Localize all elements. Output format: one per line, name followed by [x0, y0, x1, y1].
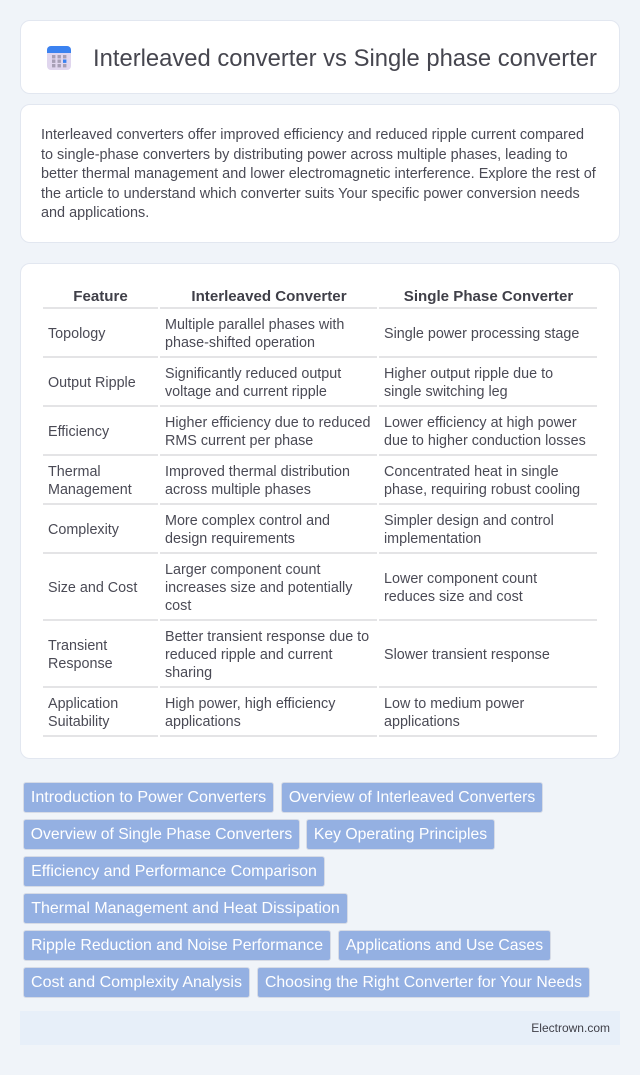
thermal single phase: Concentrated heat in single: [384, 464, 559, 480]
intro text: [41, 127, 596, 221]
tag: [306, 819, 495, 850]
application single phase: applications: [384, 714, 460, 730]
panel: comparison table: [20, 263, 620, 759]
table header: single phase converter: Single Phase Converter: [404, 288, 573, 305]
tag: Overview of Interleaved Converters: [289, 789, 535, 806]
efficiency single phase: [384, 415, 586, 449]
complexity single phase: [384, 513, 554, 547]
tag: Introduction to Power Converters: [31, 788, 266, 806]
icon: calendar: [47, 46, 71, 70]
output ripple interleaved: [165, 366, 342, 400]
output ripple single phase: [384, 366, 553, 400]
thermal interleaved: across multiple phases: [165, 482, 311, 498]
transient interleaved: Better transient response due to: [165, 629, 369, 645]
row: application suitability: Application: [48, 696, 118, 712]
efficiency single phase: Lower efficiency at high power: [384, 415, 577, 431]
thermal interleaved: [165, 464, 350, 498]
panel: header: [20, 20, 620, 94]
footer credit: Electrown.com: [531, 1021, 610, 1035]
thermal single phase: phase, requiring robust cooling: [384, 482, 580, 498]
tag: Ripple Reduction and Noise Performance: [31, 937, 323, 954]
tag: [23, 893, 348, 924]
row: complexity: Complexity: [48, 522, 119, 538]
table header: interleaved converter: Interleaved Converter: [191, 288, 347, 305]
row: size and cost: Size and Cost: [48, 580, 137, 596]
intro text: and applications.: [41, 205, 149, 221]
intro text: the article to understand which converter suits Your specific power conversion needs: [41, 186, 580, 202]
complexity interleaved: design requirements: [165, 531, 295, 547]
tag: Overview of Single Phase Converters: [31, 826, 292, 843]
transient interleaved: reduced ripple and current: [165, 647, 332, 663]
title: Interleaved converter vs Single phase converter: [93, 45, 597, 72]
row: topology: Topology: [48, 326, 105, 342]
row: output ripple: Output Ripple: [48, 375, 136, 391]
complexity interleaved: [165, 513, 330, 547]
application interleaved: applications: [165, 714, 241, 730]
row: application suitability: Suitability: [48, 714, 109, 730]
panel: introduction: [20, 104, 620, 243]
size single phase: reduces size and cost: [384, 589, 523, 605]
application single phase: Low to medium power: [384, 696, 524, 712]
tag: [281, 782, 543, 813]
size single phase: Lower component count: [384, 571, 537, 587]
footer: [20, 1011, 620, 1045]
output ripple single phase: Higher output ripple due to: [384, 366, 553, 382]
efficiency interleaved: RMS current per phase: [165, 433, 313, 449]
tag: Thermal Management and Heat Dissipation: [31, 900, 340, 917]
output ripple single phase: single switching leg: [384, 384, 508, 400]
tag: [257, 967, 590, 998]
row: transient response: [48, 638, 113, 672]
tag: [23, 856, 325, 887]
intro text: to single-phase converters by distributing power across multiple phases, leading to: [41, 146, 568, 162]
transient single phase: Slower transient response: [384, 647, 550, 663]
efficiency single phase: due to higher conduction losses: [384, 433, 586, 449]
tag: Key Operating Principles: [314, 826, 487, 843]
tag: Efficiency and Performance Comparison: [31, 863, 317, 880]
row: application suitability: [48, 696, 118, 730]
tag: [338, 930, 551, 961]
row: thermal management: Management: [48, 482, 132, 498]
topology single phase: Single power processing stage: [384, 326, 579, 342]
complexity single phase: implementation: [384, 531, 481, 547]
table header: feature: Feature: [73, 288, 128, 305]
row: thermal management: Thermal: [48, 464, 101, 480]
complexity interleaved: More complex control and: [165, 513, 330, 529]
transient interleaved: sharing: [165, 665, 212, 681]
tag: Choosing the Right Converter for Your Needs: [265, 974, 582, 991]
transient interleaved: [165, 629, 369, 681]
tag: [23, 930, 331, 961]
thermal single phase: [384, 464, 580, 498]
size interleaved: [165, 562, 352, 614]
topology interleaved: [165, 317, 344, 351]
tag: [23, 782, 274, 813]
row: thermal management: [48, 464, 132, 498]
row: transient response: Transient: [48, 638, 107, 654]
output ripple interleaved: Significantly reduced output: [165, 366, 341, 382]
topology interleaved: Multiple parallel phases with: [165, 317, 344, 333]
size interleaved: increases size and potentially: [165, 580, 352, 596]
size interleaved: Larger component count: [165, 562, 320, 578]
efficiency interleaved: Higher efficiency due to reduced: [165, 415, 370, 431]
output ripple interleaved: voltage and current ripple: [165, 384, 327, 400]
tag: Applications and Use Cases: [346, 937, 543, 954]
tag: [23, 819, 300, 850]
complexity single phase: Simpler design and control: [384, 513, 554, 529]
application interleaved: [165, 696, 336, 730]
tag: Cost and Complexity Analysis: [31, 973, 242, 991]
tag: [23, 967, 250, 998]
intro text: Interleaved converters offer improved efficiency and reduced ripple current compared: [41, 127, 584, 143]
topology interleaved: phase-shifted operation: [165, 335, 315, 351]
efficiency interleaved: [165, 415, 370, 449]
thermal interleaved: Improved thermal distribution: [165, 464, 350, 480]
row: transient response: Response: [48, 656, 113, 672]
intro text: better thermal management and lower electromagnetic interference. Explore the rest of: [41, 166, 596, 182]
application interleaved: High power, high efficiency: [165, 696, 335, 712]
size single phase: [384, 571, 537, 605]
application single phase: [384, 696, 524, 730]
row: efficiency: Efficiency: [48, 424, 109, 440]
size interleaved: cost: [165, 598, 191, 614]
